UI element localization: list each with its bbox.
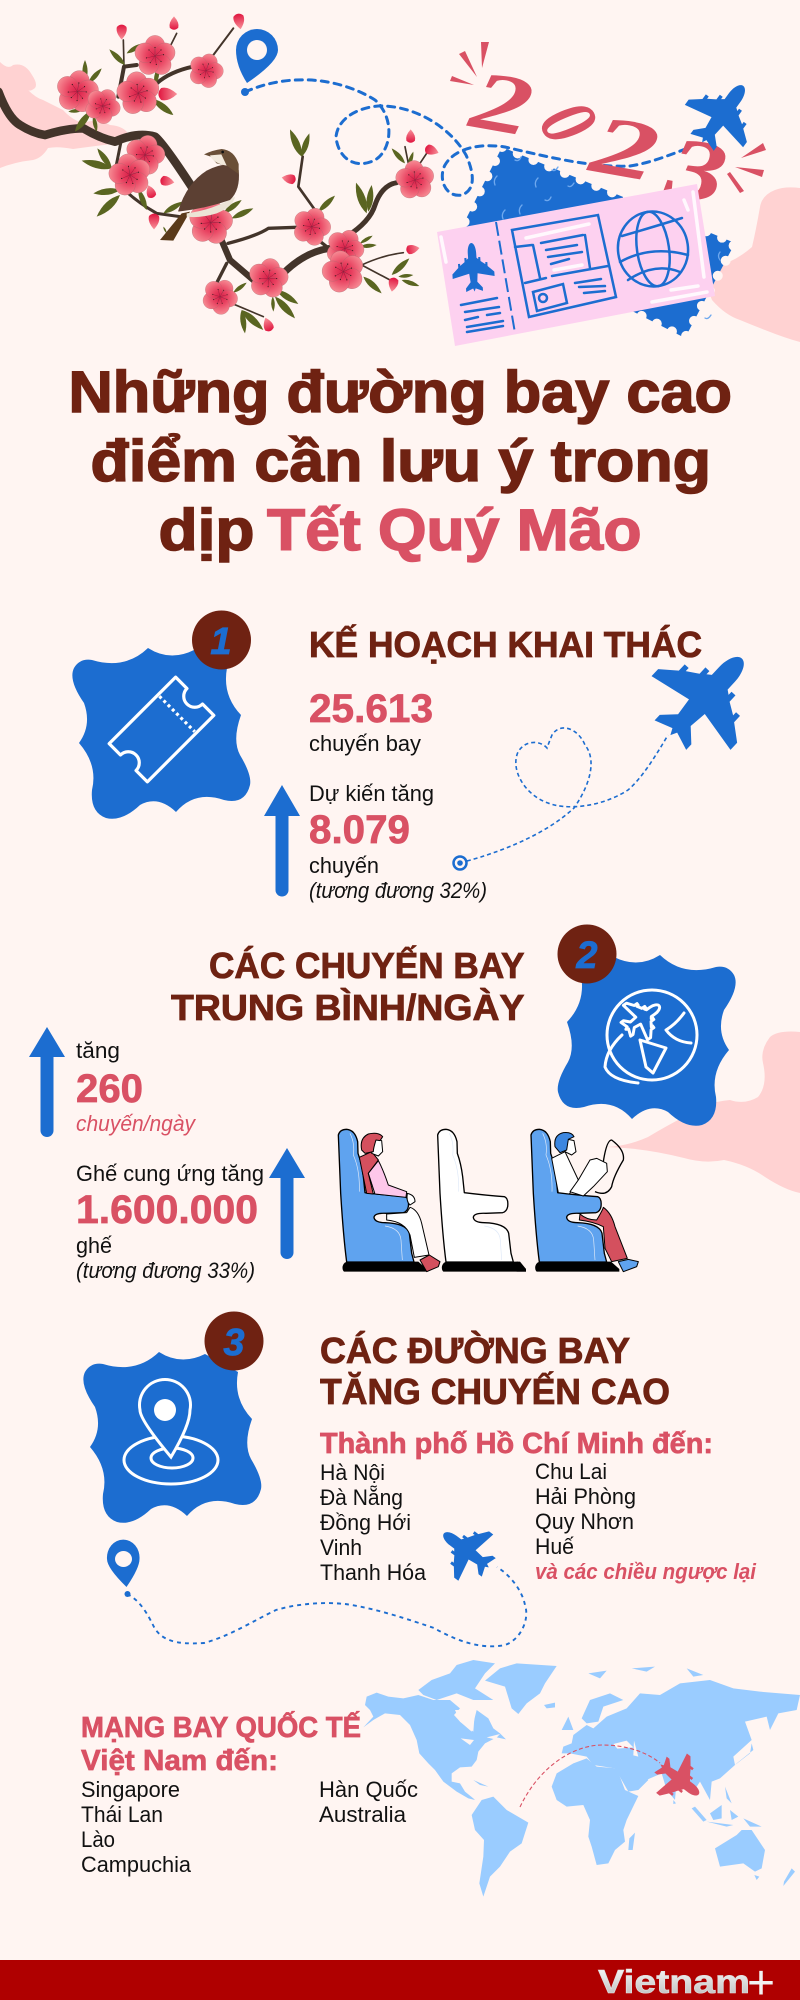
cloud: top right (709, 187, 800, 342)
number badge 3: 3 (223, 1322, 245, 1364)
icon: map pin top (236, 29, 278, 96)
cloud: middle right (607, 1032, 800, 1193)
icon: plane (631, 622, 781, 772)
panel: section 3 (83, 1312, 757, 1646)
title (68, 360, 732, 563)
stat: flights per day: 260 (76, 1067, 143, 1111)
world map (363, 1660, 800, 1897)
list: domestic column 1: Hà Nội (320, 1460, 385, 1485)
stat: increase: (tương đương 32%) (309, 878, 487, 903)
branches (0, 28, 427, 317)
stat: flights (309, 687, 433, 756)
stat: seats: Ghế cung ứng tăng (76, 1161, 264, 1186)
list: domestic column 2: Huế (535, 1534, 574, 1559)
stat: flights per day: tăng (76, 1038, 120, 1063)
arrow up (269, 1148, 305, 1259)
passenger right (552, 1132, 638, 1272)
stat: flights: 25.613 (309, 687, 433, 731)
icon: map pin (107, 1540, 140, 1597)
list: domestic column 1: Thanh Hóa (320, 1560, 427, 1585)
stat: seats: (tương đương 33%) (76, 1258, 255, 1283)
stat: seats (76, 1161, 264, 1283)
icon: plane (426, 1510, 506, 1591)
ticket backing: blue stamp (463, 147, 735, 338)
heading: KẾ HOẠCH KHAI THÁC (309, 624, 702, 665)
list: countries column 1: Singapore (81, 1777, 180, 1802)
heading: TRUNG BÌNH/NGÀY (171, 987, 524, 1028)
title: điểm cần lưu ý trong (90, 429, 711, 494)
list: domestic column 1: Đồng Hới (320, 1510, 411, 1535)
footer bar: Vietnam (598, 1963, 750, 2000)
burst strokes (450, 42, 766, 193)
ticket (437, 184, 715, 346)
year 2023: 0 (522, 86, 616, 158)
illustration: peach blossom branch with bird (0, 13, 440, 334)
panel: section 1 (72, 610, 781, 903)
list: countries column 2: Hàn Quốc (319, 1777, 418, 1802)
title: Tết Quý Mão (267, 498, 642, 563)
number badge 1 (192, 610, 251, 670)
passenger left (359, 1133, 440, 1272)
heading: Việt Nam đến: (81, 1745, 278, 1777)
list: domestic column 2: Hải Phòng (535, 1484, 636, 1509)
heading: MẠNG BAY QUỐC TẾ (81, 1710, 361, 1744)
flight arc on map (520, 1745, 660, 1807)
stat: flights per day (76, 1038, 197, 1136)
buds (117, 25, 127, 40)
arrow up (264, 785, 300, 896)
number badge 3 (204, 1312, 264, 1370)
stat: seats: ghế (76, 1233, 112, 1258)
stat: flights per day: chuyến/ngày (76, 1111, 197, 1136)
title: dịp (158, 498, 254, 563)
icon: plane top right (673, 65, 772, 164)
list: countries column 2 (319, 1777, 418, 1827)
arrow up (29, 1027, 65, 1137)
flowers (50, 67, 104, 118)
year 2023 (462, 53, 734, 224)
stat: increase (309, 781, 487, 903)
blob badge with pin icon (83, 1352, 261, 1523)
list: domestic column 2 (535, 1459, 757, 1584)
list: countries column 1 (81, 1777, 192, 1877)
panel: international network (81, 1710, 418, 1877)
stat: increase: chuyến (309, 853, 379, 878)
blob badge with globe icon (558, 955, 736, 1126)
stat: increase: Dự kiến tăng (309, 781, 434, 806)
stat: flights: chuyến bay (309, 731, 421, 756)
cloud: top left (0, 62, 127, 168)
illustration: passengers in seats (338, 1129, 638, 1272)
year 2023: 2 (582, 96, 666, 200)
stat: seats: 1.600.000 (76, 1188, 258, 1232)
list: countries column 1: Lào (81, 1827, 115, 1852)
subheading: Thành phố Hồ Chí Minh đến: (320, 1428, 713, 1460)
footer bar (0, 1957, 800, 2000)
list: domestic column 1: Vinh (320, 1535, 362, 1560)
year 2023: 2 (462, 53, 539, 154)
list: countries column 2: Australia (319, 1802, 407, 1827)
list: domestic column 1: Đà Nẵng (320, 1485, 403, 1510)
leaves (68, 41, 420, 334)
flight path (127, 1567, 526, 1646)
number badge 2: 2 (575, 935, 598, 977)
icon: target dot (454, 856, 466, 870)
number badge 1: 1 (210, 621, 232, 663)
stat: increase: 8.079 (309, 808, 410, 852)
heading: CÁC CHUYẾN BAY (209, 945, 524, 986)
list: countries column 1: Thái Lan (81, 1802, 163, 1827)
icon: red plane on map (645, 1745, 714, 1814)
title: Những đường bay cao (68, 360, 732, 425)
bird (160, 149, 239, 241)
heading: CÁC ĐƯỜNG BAY (320, 1329, 630, 1371)
list: domestic column 2: Quy Nhơn (535, 1509, 634, 1534)
heading (171, 945, 524, 1028)
year 2023: 3 (659, 117, 734, 224)
flight path: top dashed (245, 80, 688, 195)
heading (320, 1329, 670, 1412)
heading: TĂNG CHUYẾN CAO (320, 1371, 670, 1412)
list: countries column 1: Campuchia (81, 1852, 192, 1877)
heading (81, 1710, 361, 1777)
panel: section 2 (29, 924, 736, 1283)
list: domestic column 1 (320, 1460, 427, 1585)
number badge 2 (558, 924, 616, 984)
flight path: heart (467, 728, 668, 861)
list: domestic column 2: Chu Lai (535, 1459, 607, 1484)
blob badge with ticket icon (72, 648, 250, 819)
list: domestic column 2: và các chiều ngược lại (535, 1559, 757, 1584)
